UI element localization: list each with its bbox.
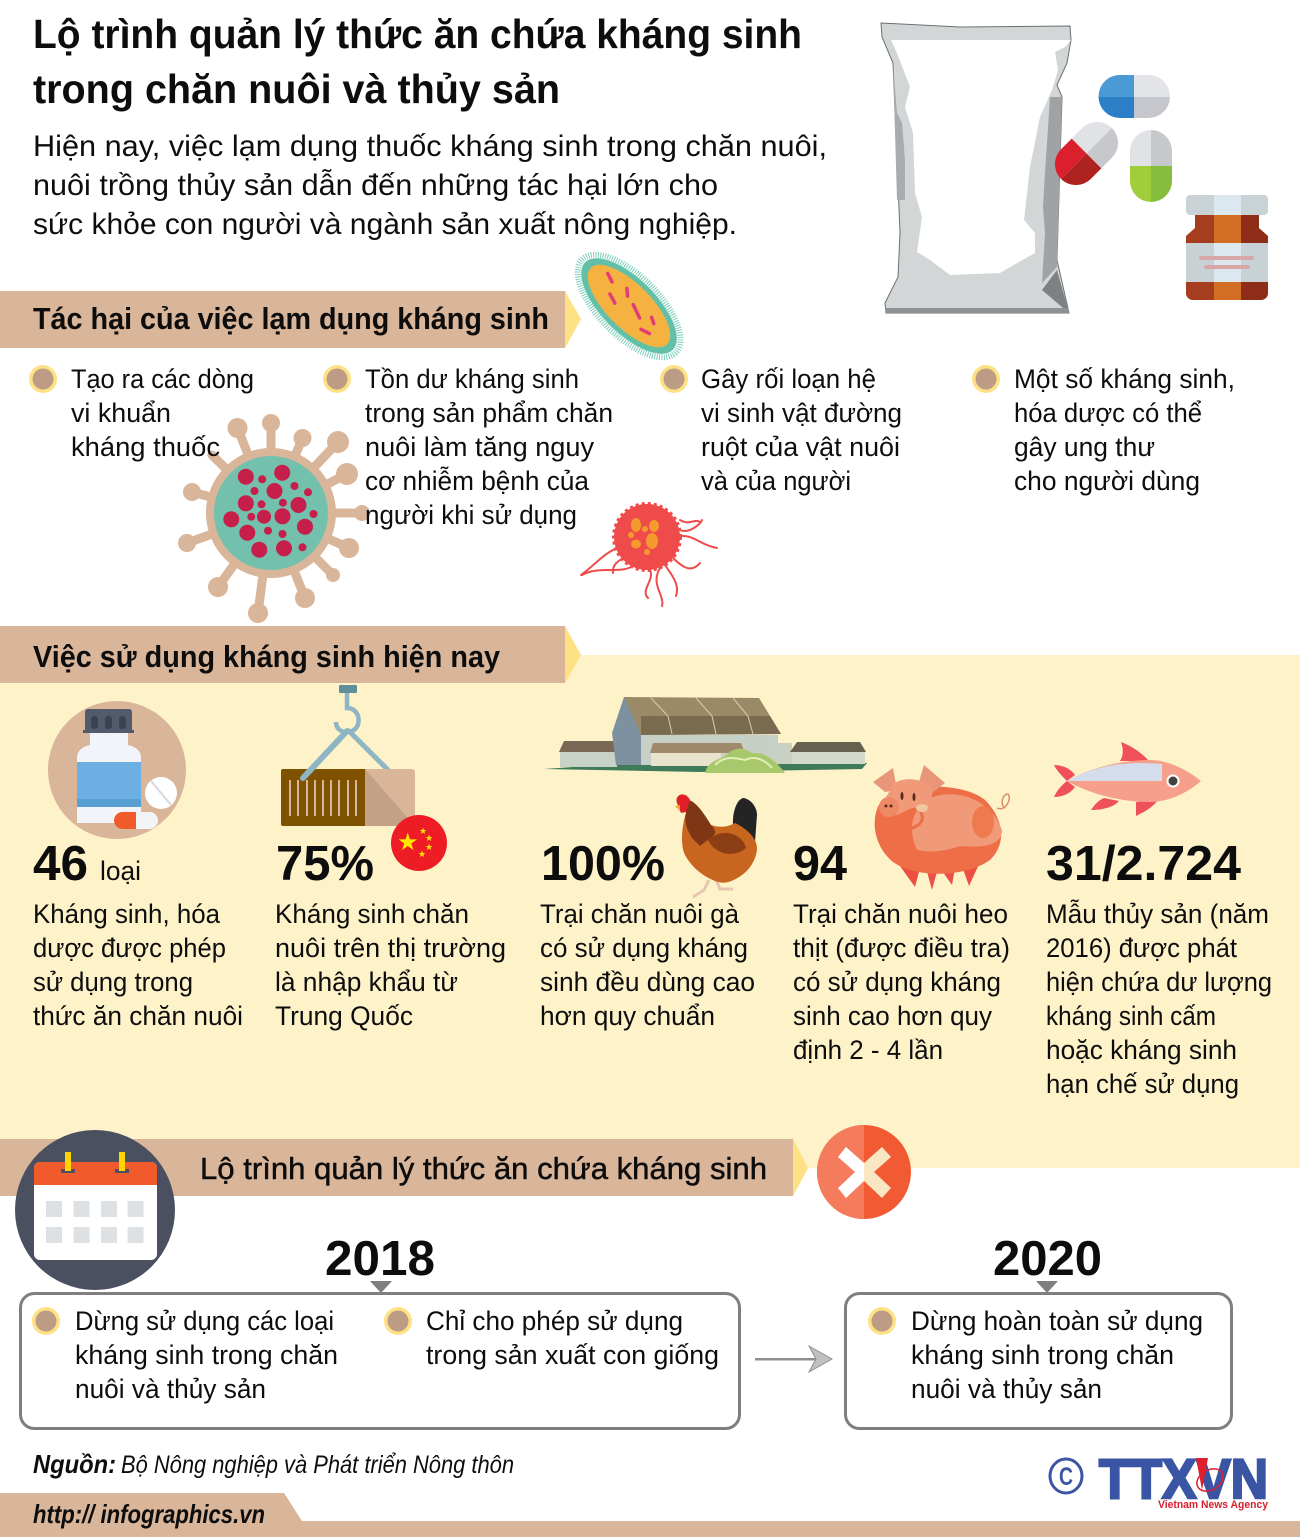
- icon: China flag: ★: [425, 833, 433, 843]
- icon: medicine jar: [1186, 195, 1268, 300]
- harm item 2: [323, 364, 613, 530]
- icon: pig: [873, 765, 1009, 890]
- text: 94 description: thịt (được điều tra): [793, 933, 1010, 963]
- text: 31/2.724 description: kháng sinh cấm: [1046, 1001, 1216, 1031]
- icon: calendar: [15, 1130, 175, 1290]
- harm item 1: Tạo ra các dòng: [71, 364, 254, 394]
- icon: prohibited cross: [817, 1125, 911, 1219]
- text: 94 description: định 2 - 4 lần: [793, 1035, 943, 1065]
- text: 100% description: hơn quy chuẩn: [540, 1001, 715, 1031]
- panel: 2020 measures: nuôi và thủy sản: [911, 1374, 1102, 1404]
- intro text: Hiện nay, việc lạm dụng thuốc kháng sinh trong chăn nuôi,: [33, 130, 827, 163]
- logo: TTXVN: TTXVN: [1099, 1447, 1268, 1510]
- intro text: nuôi trồng thủy sản dẫn đến những tác hại lớn cho: [33, 169, 718, 202]
- stat: 46 types: 46: [33, 837, 88, 891]
- harm item 2: cơ nhiễm bệnh của: [365, 465, 590, 496]
- text: 31/2.724 description: 2016) được phát: [1046, 933, 1237, 963]
- text: 100% description: [540, 899, 755, 1031]
- panel: 2020 measures: Dừng hoàn toàn sử dụng: [911, 1306, 1203, 1336]
- icon: farm buildings: [544, 697, 867, 773]
- harm item 4: Một số kháng sinh,: [1014, 364, 1235, 394]
- icon: fish: [1054, 742, 1201, 816]
- text: 46 types description: dược được phép: [33, 933, 226, 963]
- icon: China flag: [391, 815, 447, 871]
- stat: 31/2.724: 31/2.724: [1046, 837, 1241, 891]
- harm item 3: Gây rối loạn hệ: [701, 364, 876, 394]
- harm item 3: và của người: [701, 466, 851, 496]
- intro text: sức khỏe con người và ngành sản xuất nông nghiệp.: [33, 208, 737, 241]
- text: 31/2.724 description: Mẫu thủy sản (năm: [1046, 898, 1269, 929]
- harm item 4: cho người dùng: [1014, 466, 1200, 496]
- intro text: [33, 130, 827, 241]
- text: 31/2.724 description: hiện chứa dư lượng: [1046, 967, 1272, 997]
- panel: 2020 measures: kháng sinh trong chăn: [911, 1340, 1174, 1370]
- text: 75% description: là nhập khẩu từ: [275, 967, 458, 997]
- icon: bacterium: [561, 238, 697, 374]
- panel: 2018 measures: Dừng sử dụng các loại: [75, 1306, 334, 1336]
- text: 75% description: nuôi trên thị trường: [275, 933, 506, 963]
- text: 75% description: [275, 899, 506, 1031]
- harm item 4: hóa dược có thể: [1014, 398, 1202, 428]
- heading: harms: Tác hại của việc lạm dụng kháng sinh: [33, 301, 549, 336]
- stat: 46 types: [33, 837, 141, 891]
- text: 31/2.724 description: hoặc kháng sinh: [1046, 1035, 1237, 1065]
- harm item 2: người khi sử dụng: [365, 500, 577, 530]
- icon: red microbe: [581, 504, 717, 606]
- text: 46 types description: Kháng sinh, hóa: [33, 899, 221, 929]
- title: Lộ trình quản lý thức ăn chứa kháng sinh: [33, 11, 802, 57]
- harm item 3: [660, 364, 902, 496]
- text: 46 types description: sử dụng trong: [33, 967, 193, 997]
- panel: current use background: [0, 655, 1300, 1168]
- icon: China flag: ★: [397, 829, 419, 856]
- heading: current use: Việc sử dụng kháng sinh hiện nay: [33, 639, 501, 674]
- harm item 2: trong sản phẩm chăn: [365, 398, 613, 428]
- stat: 94: 94: [793, 837, 847, 891]
- year: 2018: 2018: [325, 1232, 435, 1286]
- icon: China flag: ★: [425, 842, 433, 852]
- text: 94 description: Trại chăn nuôi heo: [793, 899, 1008, 929]
- text: 31/2.724 description: [1046, 898, 1272, 1099]
- heading: roadmap: Lộ trình quản lý thức ăn chứa kháng sinh: [200, 1151, 767, 1186]
- text: 94 description: có sử dụng kháng: [793, 967, 1001, 997]
- title: trong chăn nuôi và thủy sản: [33, 66, 560, 112]
- harm item 1: [29, 364, 254, 462]
- source: Nguồn:: [33, 1449, 116, 1479]
- text: 75% description: Trung Quốc: [275, 1001, 413, 1031]
- harm item 2: Tồn dư kháng sinh: [365, 364, 579, 394]
- stat: 100%: 100%: [541, 837, 665, 891]
- icon: medicine bottle: [48, 701, 186, 839]
- panel: 2020 measures: [846, 1294, 1232, 1428]
- text: 75% description: Kháng sinh chăn: [275, 899, 469, 929]
- text: 100% description: Trại chăn nuôi gà: [540, 899, 740, 929]
- title: [33, 11, 802, 112]
- panel: 2018 measures: kháng sinh trong chăn: [75, 1340, 338, 1370]
- footer band with url: [0, 1493, 1300, 1537]
- icon: feed bag: [881, 23, 1071, 313]
- text: 31/2.724 description: hạn chế sử dụng: [1046, 1069, 1239, 1099]
- text: 46 types description: thức ăn chăn nuôi: [33, 1001, 243, 1031]
- harm item 4: gây ung thư: [1014, 432, 1155, 462]
- harm item 3: ruột của vật nuôi: [701, 432, 900, 462]
- source: Bộ Nông nghiệp và Phát triển Nông thôn: [121, 1451, 514, 1479]
- text: 46 types description: [33, 899, 243, 1031]
- stat: 75%: 75%: [276, 837, 374, 891]
- harm item 1: kháng thuốc: [71, 432, 220, 462]
- harm item 4: [972, 364, 1235, 496]
- icon: green capsule: [1130, 130, 1172, 202]
- icon: blue capsule: [1098, 75, 1170, 118]
- source: [33, 1449, 514, 1479]
- icon: chicken: [675, 794, 757, 897]
- harm item 1: vi khuẩn: [71, 398, 171, 428]
- icon: virus: [178, 414, 370, 623]
- icon: crane container: [281, 685, 415, 826]
- text: 100% description: có sử dụng kháng: [540, 933, 748, 963]
- heading: current use: [0, 626, 581, 683]
- heading: harms: [0, 291, 581, 348]
- panel: 2018 measures: [20, 1294, 740, 1428]
- year: 2020: 2020: [993, 1232, 1102, 1286]
- text: 94 description: sinh cao hơn quy: [793, 1001, 992, 1031]
- heading: roadmap: [0, 1139, 808, 1196]
- text: 100% description: sinh đều dùng cao: [540, 967, 755, 997]
- icon: red capsule: [1046, 113, 1127, 194]
- panel: 2018 measures: nuôi và thủy sản: [75, 1374, 266, 1404]
- panel: 2018 measures: trong sản xuất con giống: [426, 1340, 719, 1370]
- stat: 46 types: loại: [100, 856, 141, 886]
- panel: 2018 measures: Chỉ cho phép sử dụng: [426, 1306, 683, 1336]
- harm item 2: nuôi làm tăng nguy: [365, 432, 595, 462]
- arrow: 2018 to 2020: [755, 1346, 832, 1372]
- harm item 3: vi sinh vật đường: [701, 398, 902, 428]
- icon: China flag: ★: [419, 826, 427, 836]
- logo: TTXVN: C: [1059, 1463, 1073, 1491]
- text: 94 description: [793, 899, 1010, 1065]
- icon: China flag: ★: [418, 849, 426, 859]
- logo: TTXVN: Vietnam News Agency: [1158, 1499, 1269, 1511]
- footer band with url: http:// infographics.vn: [33, 1499, 265, 1529]
